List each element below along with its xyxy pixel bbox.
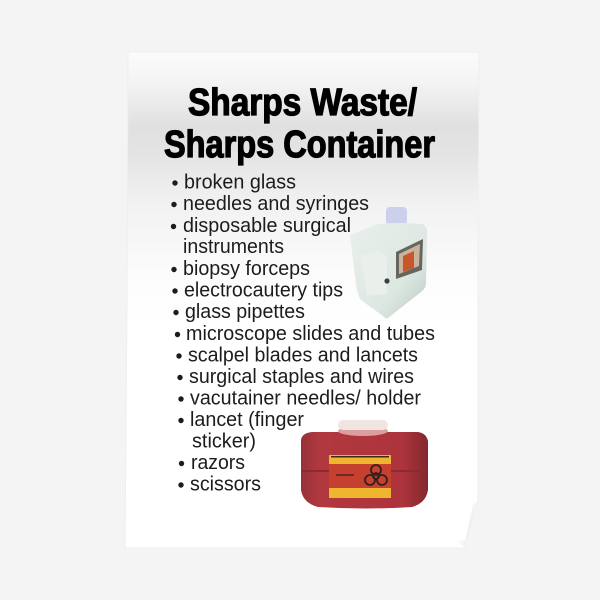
bulleted list of sharps waste	[171, 172, 435, 496]
title	[164, 82, 435, 166]
bulleted list of sharps waste: needles and syringes	[183, 193, 369, 215]
title: Sharps Waste/	[188, 82, 417, 124]
bulleted list of sharps waste: disposable surgical	[183, 215, 351, 237]
bulleted list of sharps waste: surgical staples and wires	[189, 366, 414, 388]
title: Sharps Container	[164, 124, 435, 166]
poster sheet	[125, 52, 479, 548]
bulleted list of sharps waste: scalpel blades and lancets	[188, 344, 418, 366]
page curl	[455, 500, 478, 546]
bulleted list of sharps waste: electrocautery tips	[184, 280, 343, 302]
bulleted list of sharps waste: broken glass	[184, 172, 296, 194]
bulleted list of sharps waste: biopsy forceps	[183, 258, 310, 280]
bulleted list of sharps waste: vacutainer needles/ holder	[190, 388, 421, 410]
bulleted list of sharps waste: microscope slides and tubes	[186, 323, 435, 345]
bulleted list of sharps waste: glass pipettes	[185, 301, 305, 323]
icon: biohazard symbol	[365, 465, 387, 485]
bulleted list of sharps waste: razors	[191, 452, 245, 474]
icon: white wall-mounted sharps container	[350, 207, 427, 318]
bulleted list of sharps waste: scissors	[190, 474, 261, 496]
bulleted list of sharps waste: instruments	[183, 236, 284, 258]
bulleted list of sharps waste: lancet (finger	[190, 409, 304, 431]
bulleted list of sharps waste: sticker)	[192, 430, 256, 452]
icon: red sharps container with biohazard label	[301, 420, 428, 508]
